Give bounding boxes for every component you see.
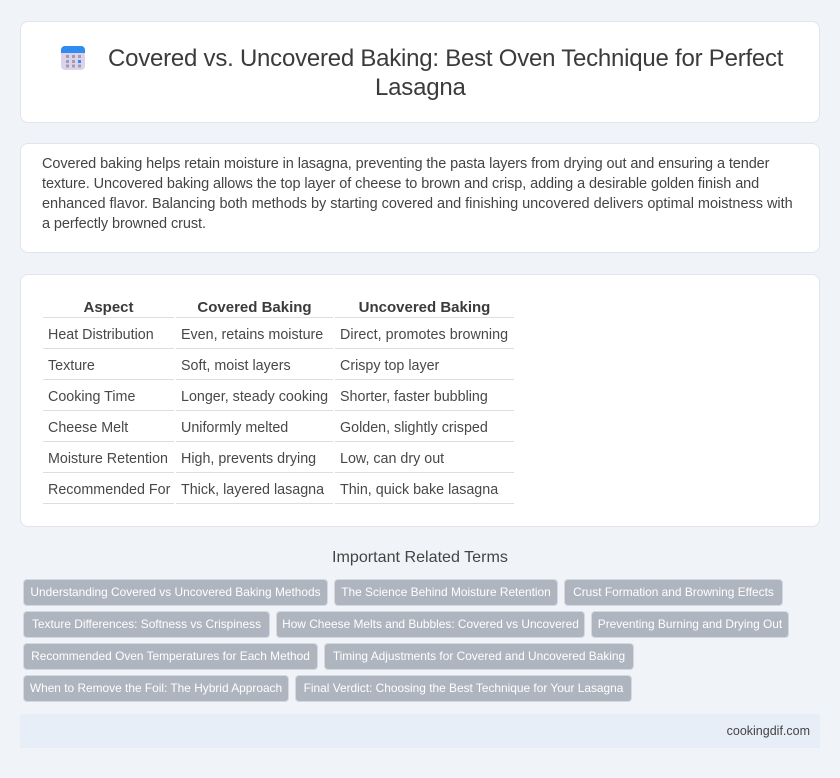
tag — [24, 612, 269, 637]
tag — [24, 580, 327, 605]
tag — [325, 644, 633, 669]
row: cooking time — [48, 389, 488, 405]
row: heat distribution: Direct, promotes browning — [340, 327, 508, 343]
row: cooking time: Cooking Time — [48, 389, 135, 405]
tag: Final Verdict: Choosing the Best Technique for Your Lasagna — [304, 681, 623, 695]
table header — [83, 299, 490, 316]
related term tags — [23, 579, 789, 702]
title — [108, 45, 784, 101]
table header: Uncovered Baking — [359, 299, 490, 316]
row: recommended for: Thin, quick bake lasagna — [340, 482, 498, 498]
tag — [277, 612, 584, 637]
row: cheese melt — [48, 420, 488, 436]
table header: Aspect — [83, 299, 134, 316]
tag: The Science Behind Moisture Retention — [341, 585, 551, 599]
tag — [24, 676, 288, 701]
row: moisture retention: High, prevents drying — [181, 451, 316, 467]
row: texture: Texture — [48, 358, 95, 374]
title: Covered vs. Uncovered Baking: Best Oven Technique for Perfect — [108, 45, 783, 72]
tag: Timing Adjustments for Covered and Uncovered Baking — [333, 649, 625, 663]
tag — [335, 580, 557, 605]
table header: Covered Baking — [197, 299, 312, 316]
footer source: cookingdif.com — [727, 724, 810, 738]
tag: When to Remove the Foil: The Hybrid Approach — [30, 681, 282, 695]
tag: Crust Formation and Browning Effects — [573, 585, 774, 599]
row: texture: Soft, moist layers — [181, 358, 291, 374]
tag: How Cheese Melts and Bubbles: Covered vs Uncovered — [282, 617, 579, 631]
row: texture — [48, 358, 440, 374]
tag — [565, 580, 782, 605]
description text: a perfectly browned crust. — [42, 216, 206, 232]
tag: Understanding Covered vs Uncovered Baking Methods — [30, 585, 321, 599]
row: cooking time: Shorter, faster bubbling — [340, 389, 488, 405]
tag — [296, 676, 631, 701]
description text: Covered baking helps retain moisture in lasagna, preventing the pasta layers from drying out and ensuring a tender — [42, 156, 769, 172]
row: moisture retention: Moisture Retention — [48, 451, 168, 467]
row: heat distribution — [48, 327, 508, 343]
tag: Texture Differences: Softness vs Crispiness — [32, 617, 261, 631]
panel: comparison table — [20, 274, 820, 527]
row: heat distribution: Even, retains moisture — [181, 327, 323, 343]
row: cheese melt: Golden, slightly crisped — [340, 420, 488, 436]
panel: description — [20, 143, 820, 253]
tag — [24, 644, 317, 669]
comparison table — [43, 299, 514, 504]
title: Lasagna — [375, 74, 466, 101]
row: cooking time: Longer, steady cooking — [181, 389, 328, 405]
footer — [20, 714, 820, 748]
description text: texture. Uncovered baking allows the top layer of cheese to brown and crisp, adding a desirable golden finish and — [42, 176, 759, 192]
row: heat distribution: Heat Distribution — [48, 327, 154, 343]
row: moisture retention: Low, can dry out — [340, 451, 444, 467]
header panel — [20, 21, 820, 123]
row: recommended for — [48, 482, 498, 498]
description text: enhanced flavor. Balancing both methods by starting covered and finishing uncovered delivers optimal moistness with — [42, 196, 793, 212]
related terms heading: Important Related Terms — [332, 548, 508, 566]
row: recommended for: Thick, layered lasagna — [181, 482, 324, 498]
icon: calendar — [61, 46, 85, 70]
row: moisture retention — [48, 451, 444, 467]
tag — [592, 612, 788, 637]
row: recommended for: Recommended For — [48, 482, 170, 498]
tag: Preventing Burning and Drying Out — [598, 617, 782, 631]
row: cheese melt: Uniformly melted — [181, 420, 288, 436]
row: cheese melt: Cheese Melt — [48, 420, 128, 436]
row: texture: Crispy top layer — [340, 358, 439, 374]
description text — [42, 156, 793, 232]
tag: Recommended Oven Temperatures for Each Method — [31, 649, 310, 663]
